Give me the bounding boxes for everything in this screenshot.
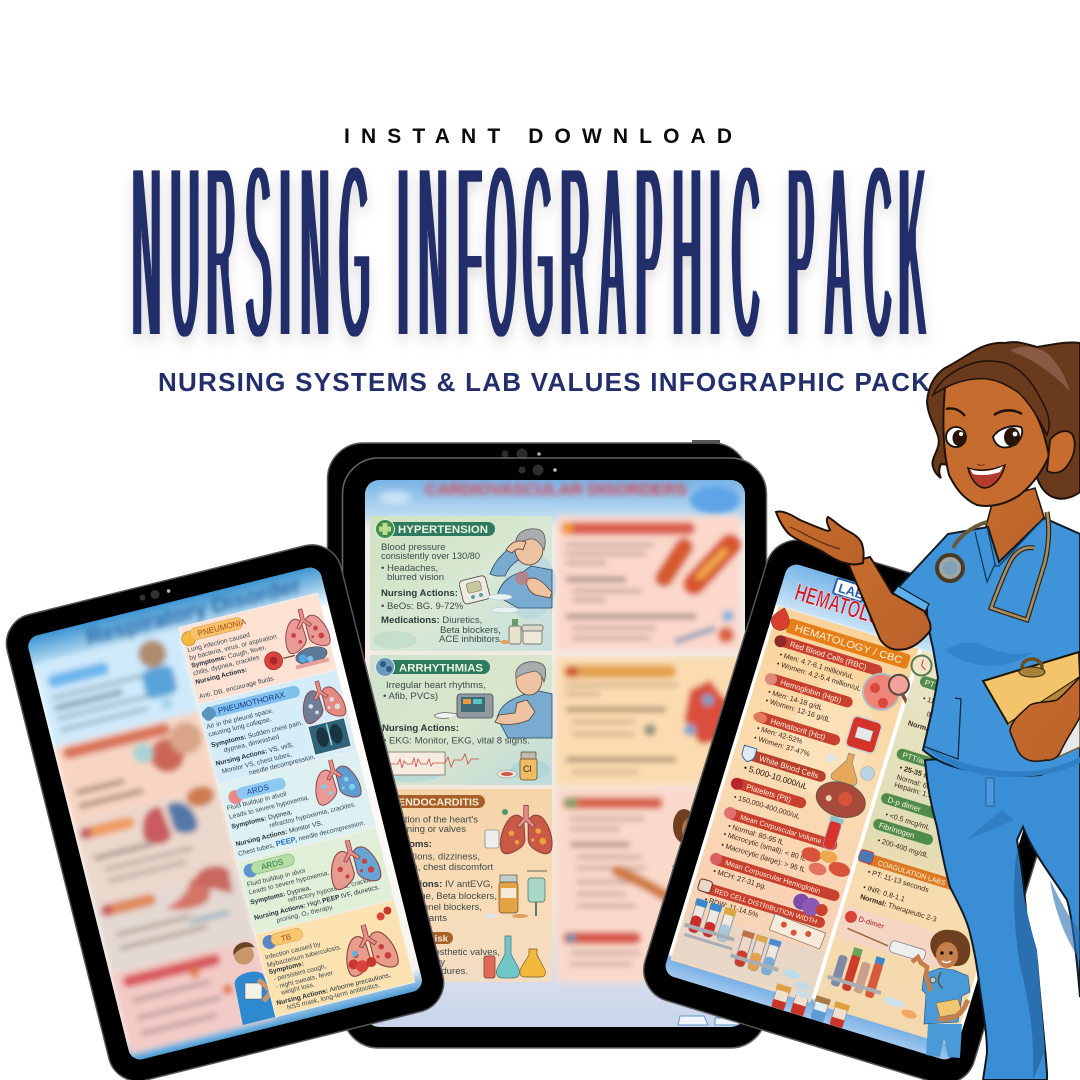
panel: pneumothorax: Symptoms: Sudden chest pain, <box>210 720 304 749</box>
scrub pocket <box>923 698 961 759</box>
blurred left column: Respiratory Disorder <box>83 572 303 650</box>
lab value pills: • Men: 42-52% <box>756 723 804 746</box>
panel: pneumothorax: causing lung collapse. <box>208 716 273 739</box>
illustration: ecg strip <box>387 752 537 780</box>
lab value pills: Mean Corpuscular Hemoglobin <box>724 858 822 896</box>
panel: ards second: proning, O₂ therapy. <box>276 904 335 925</box>
panel: pneumonia: Nursing Actions: <box>195 667 248 686</box>
panel: coagulation column: Normal: 60-70 <box>896 772 942 794</box>
panel: ards second: ARDS <box>260 857 285 872</box>
panel: coagulation column: COAGULATION LABS <box>877 860 946 887</box>
hair fringe <box>933 361 1049 435</box>
heading pill <box>376 658 490 676</box>
lab value pills: • Macrocytic (large): > 95 fL <box>720 840 807 874</box>
panel: tb: TB <box>280 932 292 944</box>
text block: Beta blockers, <box>440 625 501 636</box>
lab value pills: • Men: 14-18 g/dL <box>767 687 824 712</box>
panel: pneumonia: Anti. DB, encourage fluids. <box>198 675 276 701</box>
text block: Nursing Actions: <box>381 588 458 599</box>
lab value pills: • Microcytic (small): < 80 fL <box>722 829 808 863</box>
text block: IV drug use, dentary <box>359 957 445 968</box>
panel: ards: Symptoms: Dypnea, <box>231 809 293 831</box>
lab value pills: • RDW: 11-14.5% <box>704 895 760 920</box>
illustration: medication bottles <box>501 619 543 644</box>
panel: tb: Mybacterium tuberculosis. <box>266 944 343 969</box>
hair highlight <box>1010 347 1070 392</box>
text block: Irregular heart rhythms, <box>386 680 486 691</box>
illustration: flask <box>826 752 875 786</box>
panel: ards second <box>237 828 394 934</box>
v-neck collar <box>975 520 1042 582</box>
lab value pills: • Men: 4.7-6.1 million/uL <box>778 650 855 681</box>
illustration: petri dish <box>812 776 870 823</box>
panel: tb: Infection caused by <box>264 941 322 961</box>
forearm <box>848 557 931 650</box>
text block <box>382 680 530 746</box>
panel: coagulation column: Fibrinogen <box>878 821 916 840</box>
panel: pneumothorax: Air in the pleural space, <box>206 707 275 731</box>
pants <box>925 750 1080 1080</box>
panel: pneumothorax <box>198 670 357 785</box>
pill: at risk: At Risk <box>415 934 449 944</box>
panel: hypertension <box>370 516 556 651</box>
illustration: man holding chest <box>495 662 552 738</box>
blurred title: CARDIOVASCULAR DISORDERS <box>425 480 687 499</box>
illustration: man with headache <box>490 529 552 608</box>
text block: dyspnea, chest discomfort <box>382 862 493 873</box>
panel: pneumonia <box>179 593 338 704</box>
text block: Amiodarone, Beta blockers, <box>379 891 497 902</box>
heading pill: HYPERTENSION <box>398 524 488 536</box>
text block <box>381 542 502 645</box>
panel: ards: Nursing Actions: Monitor VS, <box>235 820 324 848</box>
panel: coagulation column: Heparin: 1.5-2.5x <box>893 780 949 805</box>
panel: coagulation column: • <0.5 mcg/mL <box>884 810 931 832</box>
panel: ards: Leads to severe hypoxemia. <box>228 794 310 821</box>
panel: ards second: Nursing Actions: High PEEP IVF, diuretics. <box>254 884 381 922</box>
hair back <box>927 342 1080 499</box>
text block: Inflammation of the heart's <box>365 814 478 826</box>
panel: endocarditis <box>397 789 553 982</box>
panel: ards: ARDS <box>246 783 270 797</box>
text block: inner lining or valves <box>379 824 466 835</box>
illustration: blood pressure monitor <box>458 575 519 613</box>
text block: blurred vision <box>387 572 444 583</box>
panel: tb: NSS mask, long-term antibiotics. <box>286 982 381 1012</box>
lab value pills: Red Blood Cells (RBC) <box>789 640 868 672</box>
panel: coagulation column: Normal: 0.9-1.1 <box>907 718 959 742</box>
heading pill: ARRHYTHMIAS <box>399 662 483 674</box>
panel: coagulation column: D-dimer <box>857 914 886 931</box>
panel: ards second: Symptoms: Dypnea, <box>250 884 312 906</box>
tablet heading: HEMATOLOGY <box>792 579 907 638</box>
text block: • Headaches, <box>381 563 438 574</box>
text block: consistently over 130/80 <box>381 551 480 562</box>
panel: tb: - night sweats, fever <box>275 970 335 991</box>
text block: Symptoms: <box>380 839 432 850</box>
tablet: front center <box>342 458 766 1048</box>
text block: Medications: Diuretics, <box>381 615 482 626</box>
panel: ards <box>218 750 376 862</box>
illustration: lab flasks <box>484 936 545 978</box>
illustration: infected lungs <box>485 805 552 854</box>
panel: hematology cbc column <box>668 605 928 1006</box>
lab value pills: Hemoglobin (Hgb) <box>779 678 843 705</box>
text block: Palpitations, dizziness, <box>383 852 480 862</box>
sample jars row <box>770 983 850 1028</box>
hand on clipboard <box>1010 677 1080 761</box>
scrub shading <box>925 643 1080 777</box>
clipboard <box>983 652 1080 757</box>
tablet heading: LAB <box>837 580 867 602</box>
panel: tb <box>255 900 415 1017</box>
lab value pills: • Women: 4.2-5.4 million/uL <box>776 659 862 693</box>
lab value pills: White Blood Cells <box>758 754 820 780</box>
panel: coagulation column: • 25-35 seconds <box>899 763 953 787</box>
small nurse illustration on right tablet <box>912 930 970 1058</box>
panel: ards second: Leads to severe hypoxemia. <box>248 870 330 896</box>
blurred right column panels <box>557 516 740 982</box>
title: nursing infographic pack: NURSING INFOGRAPHIC PACK <box>132 105 927 400</box>
panel: ards second: Fluid buildup in alvoi <box>246 867 306 889</box>
lab value pills: • 150,000-400,000/uL <box>733 792 801 821</box>
subtitle: NURSING SYSTEMS & LAB VALUES INFOGRAPHIC PACK <box>158 367 930 397</box>
small nurse peeking behind the right tablet <box>672 809 740 1025</box>
panel: ards: refractoy hypoxemia, crackles. <box>269 801 357 830</box>
lab value pills: Mean Corpuscular Volume <box>739 812 823 846</box>
lab value pills: Hematocrit (Hct) <box>769 717 827 742</box>
panel: coagulation column <box>808 648 1062 1047</box>
tablet heading <box>794 578 872 624</box>
panel: pneumothorax: needle decompression. <box>248 754 316 777</box>
heading pill <box>376 520 495 538</box>
text block: anticoagulants <box>385 913 447 924</box>
panel: coagulation column: • PT: 11-13 seconds <box>867 867 930 894</box>
panel: pneumonia: Symptoms: Cough, fever, <box>191 644 267 670</box>
kicker: instant download: INSTANT DOWNLOAD <box>344 125 732 148</box>
nose and mouth <box>968 464 1005 488</box>
blurred left column <box>32 579 302 1058</box>
scrub top <box>893 518 1080 776</box>
heading <box>769 605 914 669</box>
illustration: test tube racks <box>673 897 830 1001</box>
tablet: back center <box>328 440 748 1033</box>
panel: coagulation column: • 200-400 mg/dL <box>876 836 930 860</box>
blurred title <box>379 480 740 514</box>
character: main nurse <box>776 342 1080 1080</box>
panel: tb: Nursing Actions: Airborne precautions, <box>276 972 392 1007</box>
panel: tb: Symptoms: <box>268 961 305 976</box>
illustration: heart monitor <box>435 694 493 718</box>
text block: ACE inhibitors. <box>439 634 502 645</box>
panel: ards: Chest tubes, PEEP, needle decompression. <box>237 818 366 858</box>
lab value pills: • Women: 12-16 g/dL <box>764 696 832 724</box>
panel: tb: - persistent cough, <box>273 963 327 983</box>
panel: ards: Fluid buildup in alvoli <box>226 791 288 812</box>
panel: pneumothorax: dypnea, diminished <box>223 734 280 754</box>
text block: Valve disease, prosthetic valves, <box>362 947 500 958</box>
illustration: blood bag <box>845 715 883 754</box>
text block: • EKG: Monitor, EKG, vital 8 signs. <box>383 736 530 746</box>
tablet: right lab values hematology <box>642 540 1038 1080</box>
panel: pneumothorax: Nursing Actions: VS, vsS, <box>215 741 295 768</box>
panel: coagulation column: • INR: 0.8-1.1 <box>862 882 906 904</box>
lab value pills: • Normal: 80-95 fL <box>727 821 785 847</box>
lab value pills <box>697 635 882 928</box>
small nurse in the left column <box>233 942 276 1025</box>
text block: Nursing Actions: IV antEVG, <box>365 879 493 890</box>
neck <box>985 488 1045 566</box>
stethoscope <box>937 512 1049 620</box>
text block: Blood pressure <box>381 542 446 553</box>
illustration: blood cells under magnifier <box>862 672 910 711</box>
lab value pills: • MCH: 27-31 pg. <box>712 866 768 891</box>
panel: pneumonia: chills, dypnea, crackles <box>193 654 261 677</box>
ear <box>1047 431 1075 473</box>
panel: coagulation column: Normal: Therapeutic 2-3 <box>859 892 938 924</box>
panel: pneumothorax: PNEUMOTHORAX <box>217 690 286 715</box>
tablet: left respiratory disorders <box>0 539 450 1080</box>
illustration: ecg strip: Cl <box>523 764 532 774</box>
panel: pneumothorax: Monitor VS, chest tubes, <box>221 751 293 775</box>
text block <box>404 816 500 974</box>
panel: tb: weight loss. <box>279 981 316 997</box>
illustration: purple cells <box>790 892 830 920</box>
illustration: test tube and red cells <box>797 811 864 884</box>
illustration: medicine bottle and iv bag <box>485 871 547 918</box>
text block: Calcium channel blockers, <box>370 902 482 913</box>
panel: coagulation column: INR <box>925 709 940 722</box>
panel: pneumonia: PNEUMONIA <box>197 617 248 638</box>
panel: ards second: refractory hypoxemia, crackles. <box>287 875 378 904</box>
heading pill: ENDOCARDITIS <box>398 797 479 808</box>
panel: arrhythmias <box>370 655 552 785</box>
lab value pills: RED CELL DISTRIBUTION WIDTH <box>713 888 818 926</box>
lab value pills: Platelets (Plt) <box>745 782 793 805</box>
text block: • Afib, PVCs) <box>383 691 438 702</box>
face <box>943 374 1049 506</box>
eyes <box>946 408 1022 448</box>
pants shading <box>966 810 1080 1080</box>
panel: coagulation column: D-p dimer <box>887 795 922 814</box>
panel: coagulation column: PT <box>924 678 936 689</box>
lab value pills: • Women: 37-47% <box>753 733 812 759</box>
text block: Nursing Actions: <box>382 723 459 734</box>
heading: HEMATOLOGY / CBC <box>793 623 904 666</box>
pill: at risk <box>432 932 453 944</box>
illustration: microscope slide <box>769 914 826 949</box>
panel: coagulation column: PTT/aPTT <box>901 751 939 770</box>
lab value pills: • 5,000-10,000/uL <box>743 762 809 791</box>
text block: dental procedures. <box>389 966 468 977</box>
raised hand <box>776 511 864 564</box>
panel: pneumonia: Lung infection caused <box>187 632 251 654</box>
panel: pneumonia: by bacteria, virus, or aspiration <box>189 633 278 662</box>
text block: • BeOs: BG. 9-72% <box>381 601 464 612</box>
panel: coagulation column: • 11-13 seconds <box>922 694 974 717</box>
center screen: cardiovascular disorders <box>359 480 745 1027</box>
